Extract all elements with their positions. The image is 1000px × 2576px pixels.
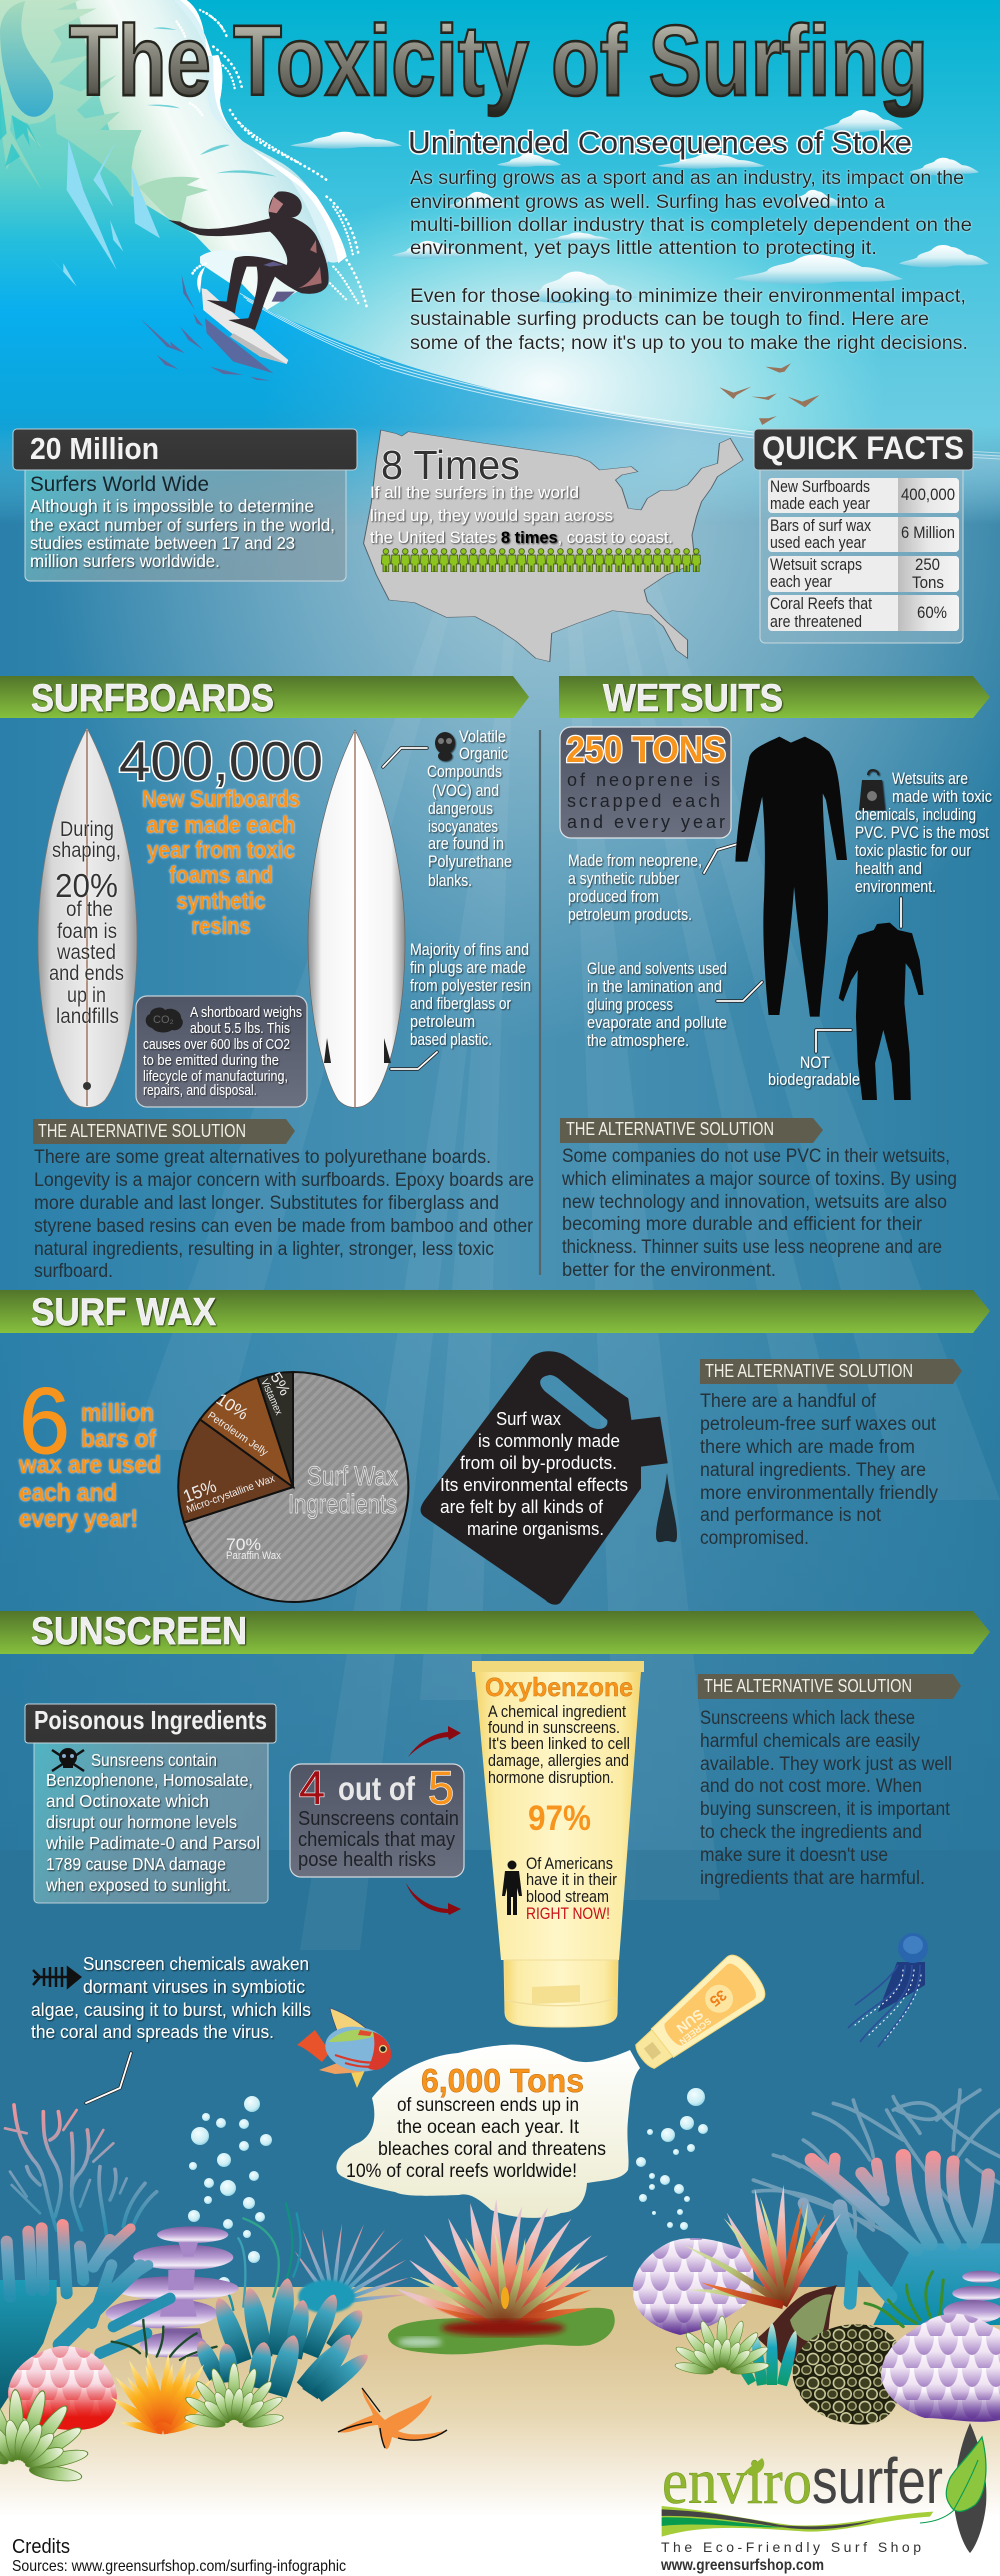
alternative solution: sunscreen: ingredients that are harmful.	[700, 1868, 925, 1889]
banner: surfboards: SURFBOARDS	[31, 677, 274, 720]
small tiered coral	[943, 2271, 1000, 2323]
panel: 20 million surfers: the exact number of surfers in the world,	[30, 515, 335, 535]
panel: 20 million surfers	[13, 429, 357, 581]
intro text: environment grows as well. Surfing has evolved into a	[410, 192, 885, 213]
fact row: new surfboards: 400,000	[901, 485, 955, 504]
text: coral virus note	[31, 1953, 311, 2042]
icon: sunscreen tube with oxybenzone facts: have it in their	[526, 1871, 617, 1889]
subtitle: Unintended Consequences of Stoke	[408, 125, 912, 160]
bubbles	[188, 2088, 708, 2289]
anemone: central coral	[388, 2199, 615, 2354]
fact row: coral reefs: are threatened	[770, 612, 862, 631]
fact row: surf wax: Bars of surf wax	[770, 516, 871, 535]
panel: poisonous ingredients	[25, 1704, 276, 1903]
logo: envirosurfer	[660, 2423, 986, 2574]
stat: 6 million bars of wax	[18, 1368, 161, 1533]
large pink-tipped coral	[873, 2243, 1000, 2325]
icon: sunscreen tube with oxybenzone facts: RIGHT NOW!	[526, 1905, 610, 1923]
stat: 400,000 new surfboards: 400,000	[119, 730, 323, 792]
icon: sunscreen tube with oxybenzone facts: blood stream	[526, 1888, 609, 1906]
text: neoprene note	[568, 852, 702, 924]
banner: sunscreen: SUNSCREEN	[31, 1610, 247, 1653]
map: United States with 8 times callout: the United States 8 times, coast to coast.	[370, 528, 673, 547]
text: VOC note: (VOC) and	[432, 782, 499, 800]
green leaf clusters	[183, 2363, 285, 2430]
panel: poisonous ingredients: while Padimate-0 and Parsol	[45, 1833, 260, 1853]
icon: sunscreen tube with oxybenzone facts	[472, 1661, 644, 2027]
surfboard with 20 percent foam waste: and ends	[49, 962, 124, 985]
alternative solution: surfboards: There are some great alternatives to polyurethane boards.	[34, 1147, 491, 1168]
panel: 20 million surfers: million surfers worldwide.	[30, 551, 220, 571]
icon: large wetsuit	[735, 737, 847, 1017]
icon: small wetsuit	[839, 923, 924, 1100]
text: fins note: and fiberglass or	[410, 995, 511, 1013]
chart: surf wax ingredients pie: Paraffin Wax	[226, 1550, 281, 1562]
stat: 6 million bars of wax: every year!	[19, 1505, 138, 1533]
surfboard with 20 percent foam waste: wasted	[56, 941, 116, 964]
panel: 250 tons of neoprene: and every year	[567, 812, 726, 832]
fact row: coral reefs	[768, 594, 959, 631]
coral reef: right group	[633, 2090, 1000, 2425]
text: VOC note: Polyurethane	[428, 853, 512, 871]
alternative solution: wetsuits: becoming more durable and efficient for their	[562, 1214, 923, 1235]
map: United States with 8 times callout	[364, 430, 743, 662]
fact row: new surfboards: New Surfboards	[770, 477, 870, 496]
alternative solution: sunscreen: make sure it doesn't use	[700, 1845, 888, 1866]
green leaf cluster	[674, 2316, 770, 2376]
panel: 4 out of 5 sunscreens: pose health risks	[298, 1849, 436, 1871]
panel: 4 out of 5 sunscreens: 5	[428, 1761, 454, 1814]
text: glue note: gluing process	[587, 996, 673, 1014]
panel: quick facts: QUICK FACTS	[762, 430, 964, 466]
purple petal coral	[633, 2238, 754, 2335]
banner: surfboards	[0, 676, 529, 720]
icon: sunscreen tube with oxybenzone facts: hormone disruption.	[488, 1769, 614, 1787]
panel: CO2 shortboard: causes over 600 lbs of CO2	[143, 1037, 290, 1053]
banner: wetsuits: WETSUITS	[603, 677, 783, 720]
icon: oil jug with text: is commonly made	[478, 1431, 620, 1451]
stat: 400,000 new surfboards: New Surfboards	[142, 786, 300, 813]
panel: poisonous ingredients: Sunsreens contain	[91, 1750, 217, 1770]
alternative solution: sunscreen: harmful chemicals are easily	[700, 1731, 920, 1752]
icon: oil jug with text: Its environmental effects	[440, 1475, 628, 1495]
fact row: surf wax: 6 Million	[901, 523, 955, 542]
icon: oil jug with text: marine organisms.	[467, 1519, 604, 1539]
surfboard with 20 percent foam waste: 20%	[55, 867, 118, 904]
chart: surf wax ingredients pie: 15%	[180, 1476, 219, 1507]
alternative solution: wetsuits: THE ALTERNATIVE SOLUTION	[566, 1119, 774, 1139]
callout: 6,000 tons blob with bottle	[336, 1950, 771, 2218]
icon: sunscreen bottle: SCREEN	[677, 2016, 713, 2047]
white crest and spray	[173, 0, 367, 307]
callout: 6,000 tons blob with bottle: bleaches coral and threatens	[378, 2139, 606, 2160]
intro text	[410, 168, 972, 354]
fact row: wetsuit scraps: 250	[915, 555, 940, 574]
chart: surf wax ingredients pie: Micro-crystalline Wax	[185, 1472, 277, 1516]
chart: surf wax ingredients pie	[178, 1370, 408, 1602]
fact row: wetsuit scraps: each year	[770, 572, 832, 591]
surfboard with 20 percent foam waste: landfills	[56, 1005, 119, 1028]
panel: CO2 shortboard: repairs, and disposal.	[143, 1083, 257, 1099]
text: neoprene note: petroleum products.	[568, 906, 692, 924]
panel: 4 out of 5 sunscreens: 4	[299, 1761, 325, 1814]
teal mass	[0, 2280, 57, 2410]
panel: 250 tons of neoprene	[560, 727, 731, 838]
text: neoprene note: produced from	[568, 888, 659, 906]
arrow: up to tube	[408, 1726, 461, 1757]
callout lines: surfboards and wetsuits	[383, 748, 901, 1069]
text: coral virus note: dormant viruses in symbiotic	[83, 1976, 305, 1997]
alternative solution: sunscreen: Sunscreens which lack these	[700, 1708, 915, 1729]
stat: 400,000 new surfboards	[119, 730, 323, 940]
pale branching coral	[753, 2090, 1000, 2247]
icon: sunscreen tube with oxybenzone facts: found in sunscreens.	[488, 1719, 620, 1737]
credits: Credits	[12, 2536, 70, 2558]
alternative solution: sunscreen: to check the ingredients and	[700, 1822, 922, 1843]
alternative solution: wetsuits: better for the environment.	[562, 1260, 776, 1281]
illustration: breaking wave with surfer	[0, 0, 1000, 560]
orange spiky coral	[108, 2352, 218, 2435]
callout line: coral virus	[86, 2053, 131, 2103]
intro text: environment, yet pays little attention to protecting it.	[410, 238, 877, 259]
fact row: wetsuit scraps: Tons	[912, 573, 944, 592]
text: coral virus note: Sunscreen chemicals awaken	[83, 1953, 309, 1974]
alternative solution: surf wax: THE ALTERNATIVE SOLUTION	[705, 1361, 913, 1381]
credits	[12, 2536, 346, 2575]
panel: 20 million surfers: 20 Million	[30, 431, 159, 466]
icon: oil drop	[656, 1473, 677, 1542]
text: VOC note: dangerous	[428, 800, 493, 818]
coral reef: left group	[0, 2105, 409, 2493]
text: glue note	[587, 960, 727, 1050]
chart: surf wax ingredients pie: 5%	[267, 1370, 293, 1399]
icon: sunscreen tube with oxybenzone facts: Oxybenzone	[485, 1672, 633, 1702]
purple tiered coral	[106, 2226, 239, 2358]
map: United States with 8 times callout: 8 Times	[381, 442, 520, 488]
panel: poisonous ingredients: and Octinoxate which	[46, 1791, 209, 1811]
text: glue note: in the lamination and	[587, 978, 722, 996]
alternative solution: surf wax: natural ingredients. They are	[700, 1460, 926, 1481]
alternative solution: surf wax: There are a handful of	[700, 1391, 877, 1412]
stat: 6 million bars of wax: million	[81, 1399, 154, 1427]
text: glue note: the atmosphere.	[587, 1032, 689, 1050]
panel: poisonous ingredients: 1789 cause DNA damage	[46, 1854, 226, 1874]
chart: surf wax ingredients pie: Vistamex	[258, 1377, 285, 1418]
green seagrass	[865, 2272, 943, 2327]
alternative solution: wetsuits: new technology and innovation, wetsuits are also	[562, 1192, 947, 1213]
panel: poisonous ingredients: disrupt our hormone levels	[46, 1812, 237, 1832]
text: VOC note: Compounds	[427, 763, 502, 781]
surfboard with 20 percent foam waste: During	[60, 818, 114, 841]
icon: sunscreen bottle: SUN	[674, 2006, 707, 2037]
text: glue note: Glue and solvents used	[587, 960, 727, 978]
text: neoprene note: a synthetic rubber	[568, 870, 679, 888]
stat: 400,000 new surfboards: synthetic	[176, 888, 266, 915]
text: fins note: petroleum	[410, 1013, 475, 1031]
panel: 20 million surfers: Although it is impossible to determine	[30, 496, 314, 516]
icon: CO2 cloud	[146, 1007, 183, 1032]
icon: sunscreen tube with oxybenzone facts: 97%	[528, 1799, 591, 1838]
alternative solution: sunscreen	[698, 1674, 961, 1889]
panel: 4 out of 5 sunscreens: chemicals that may	[298, 1829, 455, 1851]
text: fins note	[410, 941, 531, 1049]
text: fins note: Majority of fins and	[410, 941, 529, 959]
alternative solution: surfboards: THE ALTERNATIVE SOLUTION	[38, 1121, 246, 1141]
callout: 6,000 tons blob with bottle: 10% of coral reefs worldwide!	[346, 2161, 577, 2182]
alternative solution: surfboards: natural ingredients, resulting in a lighter, stronger, less toxic	[34, 1239, 494, 1260]
stat: 6 million bars of wax: each and	[19, 1479, 117, 1507]
panel: 250 tons of neoprene: scrapped each	[567, 791, 721, 811]
panel: poisonous ingredients: Benzophenone, Homosalate,	[46, 1770, 253, 1790]
banner: surf wax: SURF WAX	[31, 1291, 216, 1334]
panel: 4 out of 5 sunscreens: Sunscreens contain	[298, 1808, 459, 1830]
alternative solution: wetsuits: Some companies do not use PVC in their wetsuits,	[562, 1146, 950, 1167]
fact row: coral reefs: Coral Reefs that	[770, 594, 872, 613]
panel: CO2 shortboard: to be emitted during the	[143, 1053, 279, 1069]
swoosh	[662, 2506, 933, 2537]
text: not biodegradable: biodegradable	[768, 1071, 860, 1089]
chart: surf wax ingredients pie: Petroleum Jelly	[205, 1410, 271, 1459]
alternative solution: surf wax: petroleum-free surf waxes out	[700, 1414, 937, 1435]
text: wetsuit toxic chemicals note	[855, 770, 992, 896]
icon: board and leaf	[920, 2423, 986, 2553]
thin pink-tipped branching coral	[5, 2105, 157, 2237]
foreground blue coral	[60, 2265, 170, 2353]
fact row: new surfboards	[768, 477, 959, 513]
alternative solution: sunscreen: THE ALTERNATIVE SOLUTION	[704, 1676, 912, 1696]
alternative solution: sunscreen: and do not cost more. When	[700, 1776, 922, 1797]
logo: envirosurfer: The Eco-Friendly Surf Shop	[661, 2539, 921, 2555]
credits: Sources: www.greensurfshop.com/surfing-infographic	[12, 2558, 346, 2575]
text: fins note: fin plugs are made	[410, 959, 526, 977]
chart: surf wax ingredients pie: 70%	[226, 1535, 261, 1554]
alternative solution: surf wax: compromised.	[700, 1528, 809, 1549]
icon: tropical fish	[297, 2008, 394, 2088]
banner: sunscreen	[0, 1610, 990, 1654]
teal-green seagrass	[207, 2203, 301, 2310]
surfboard with 20 percent foam waste: foam is	[57, 920, 117, 943]
alternative solution: wetsuits	[560, 1118, 957, 1281]
map: United States with 8 times callout: lined up, they would span across	[370, 506, 613, 525]
text: not biodegradable: NOT	[800, 1054, 830, 1072]
alternative solution: surf wax: more environmentally friendly	[700, 1483, 938, 1504]
intro text: some of the facts; now it's up to you to make the right decisions.	[410, 333, 968, 354]
panel: 20 million surfers: Surfers World Wide	[30, 473, 209, 496]
icon: skull and crossbones	[52, 1748, 84, 1771]
red petal coral	[8, 2346, 117, 2430]
icon: oil jug with text: from oil by-products.	[460, 1453, 617, 1473]
surfboard underside with fins	[308, 730, 405, 1108]
intro text: sustainable surfing products can be tough to find. Here are	[410, 309, 929, 330]
icon: CO2 cloud: CO₂	[153, 1014, 174, 1026]
icon: oil jug with text: Surf wax	[496, 1409, 561, 1429]
text: VOC note: blanks.	[428, 872, 472, 890]
text: VOC note: Volatile	[459, 728, 506, 746]
callout: 6,000 tons blob with bottle: 6,000 Tons	[421, 2062, 584, 2099]
panel: CO2 shortboard: lifecycle of manufacturing,	[143, 1069, 288, 1085]
fact row: surf wax	[768, 516, 959, 552]
stat: 400,000 new surfboards: are made each	[146, 812, 296, 839]
panel: poisonous ingredients: Poisonous Ingredients	[34, 1705, 267, 1735]
divider	[539, 730, 541, 1275]
surfboard with 20 percent foam waste: up in	[67, 984, 106, 1007]
alternative solution: surfboards: surfboard.	[34, 1261, 113, 1282]
olive round coral	[793, 2324, 903, 2425]
panel: 20 million surfers: studies estimate between 17 and 23	[30, 533, 295, 553]
alternative solution: wetsuits: which eliminates a major source of toxins. By using	[561, 1169, 957, 1190]
small teal fingers	[723, 2323, 801, 2386]
panel: 4 out of 5 sunscreens: out of	[338, 1770, 416, 1807]
stat: 400,000 new surfboards: foams and	[169, 862, 273, 889]
alternative solution: surf wax: and performance is not	[700, 1505, 882, 1526]
birds	[719, 363, 820, 425]
text: not biodegradable	[768, 1054, 860, 1089]
alternative solution: sunscreen: buying sunscreen, it is important	[700, 1799, 951, 1820]
panel: CO2 shortboard	[136, 996, 307, 1107]
icon: sunscreen tube with oxybenzone facts: It's been linked to cell	[488, 1735, 630, 1753]
intro text: Even for those looking to minimize their environmental impact,	[410, 286, 966, 307]
anemone mantle	[757, 2285, 837, 2368]
icon: person	[502, 1860, 522, 1915]
white lines of the wave lip continuing right	[380, 360, 1000, 459]
icon: sunscreen bottle	[625, 1950, 771, 2081]
icon: oil jug with text: are felt by all kinds of	[440, 1497, 604, 1517]
alternative solution: surf wax	[700, 1359, 962, 1549]
text: glue note: evaporate and pollute	[587, 1014, 727, 1032]
icon: starfish	[338, 2388, 447, 2449]
panel: CO2 shortboard: about 5.5 lbs. This	[190, 1021, 290, 1037]
text: VOC note: are found in	[428, 835, 504, 853]
text: VOC note: isocyanates	[428, 818, 498, 836]
fact row: coral reefs: 60%	[917, 603, 947, 622]
fact row: new surfboards: made each year	[770, 494, 870, 513]
arrow: down to tube	[406, 1883, 461, 1915]
text: coral virus note: algae, causing it to burst, which kills	[31, 1999, 311, 2020]
text: VOC note	[427, 728, 512, 890]
alternative solution: surf wax: there which are made from	[700, 1437, 915, 1458]
alternative solution: sunscreen: available. They work just as well	[700, 1754, 952, 1775]
banner: wetsuits	[559, 676, 990, 720]
alternative solution: surfboards: styrene based resins can even be made from bamboo and other	[34, 1216, 534, 1237]
grass anemone	[684, 2185, 841, 2313]
banner: surf wax	[0, 1290, 990, 1334]
icon: nuclear plant	[859, 770, 885, 810]
logo: envirosurfer: enviro	[662, 2446, 812, 2518]
chart: surf wax ingredients pie: Ingredients	[288, 1489, 397, 1519]
stat: 400,000 new surfboards: resins	[192, 913, 250, 940]
stat: 6 million bars of wax: wax are used	[18, 1451, 161, 1479]
icon: sunscreen tube with oxybenzone facts: Of Americans	[526, 1855, 613, 1873]
icon: oil jug with text	[421, 1351, 668, 1605]
alternative solution: surfboards: more durable and last longer. Substitutes for fiberglass and	[34, 1193, 499, 1214]
alternative solution: surfboards	[33, 1119, 534, 1282]
icon: sunscreen bottle: 35	[706, 1986, 730, 2010]
icon: jellyfish	[848, 1933, 928, 2047]
text: wetsuit toxic chemicals note: health and	[855, 860, 922, 878]
fact row: wetsuit scraps	[768, 555, 959, 592]
callout: 6,000 tons blob with bottle: of sunscreen ends up in	[397, 2095, 579, 2116]
stat: 400,000 new surfboards: year from toxic	[147, 837, 295, 864]
callout: 6,000 tons blob with bottle: the ocean each year. It	[397, 2117, 580, 2138]
fact row: wetsuit scraps: Wetsuit scraps	[770, 555, 862, 574]
panel: 4 out of 5 sunscreens	[290, 1761, 464, 1877]
intro text: multi-billion dollar industry that is completely dependent on the	[410, 215, 972, 236]
text: fins note: based plastic.	[410, 1031, 492, 1049]
panel: poisonous ingredients: when exposed to sunlight.	[45, 1875, 231, 1895]
stat: 6 million bars of wax: bars of	[81, 1425, 157, 1453]
stat: 6 million bars of wax: 6	[19, 1368, 70, 1473]
icon: gas mask	[435, 732, 455, 761]
text: neoprene note: Made from neoprene,	[568, 852, 702, 870]
icon: sunscreen tube with oxybenzone facts: A chemical ingredient	[488, 1703, 626, 1721]
text: fins note: from polyester resin	[410, 977, 531, 995]
panel: 250 tons of neoprene: of neoprene is	[567, 770, 721, 790]
icon: sunscreen tube with oxybenzone facts: damage, allergies and	[488, 1752, 629, 1770]
alternative solution: wetsuits: thickness. Thinner suits use less neoprene and are	[562, 1237, 942, 1258]
alternative solution: surfboards: Longevity is a major concern with surfboards. Epoxy boards are	[34, 1170, 534, 1191]
logo: envirosurfer: surfer	[812, 2445, 943, 2517]
chart: surf wax ingredients pie: Surf Wax	[307, 1461, 398, 1491]
thick branch coral	[7, 2225, 131, 2297]
surfboard with 20 percent foam waste	[38, 728, 137, 1108]
text: VOC note: Organic	[459, 745, 508, 763]
text: coral virus note: the coral and spreads the virus.	[31, 2021, 274, 2042]
icon: fish skeleton	[33, 1967, 80, 1987]
text: wetsuit toxic chemicals note: chemicals, including	[855, 806, 976, 824]
clouds	[290, 110, 989, 303]
panel: quick facts	[754, 429, 973, 643]
surfboard with 20 percent foam waste: of the	[66, 898, 113, 921]
text: wetsuit toxic chemicals note: toxic plastic for our	[855, 842, 971, 860]
teal finger coral	[192, 2277, 373, 2403]
purple petal coral large	[881, 2314, 1000, 2422]
light blue and pink fan	[292, 2223, 409, 2305]
surfer	[140, 191, 329, 381]
map: United States with 8 times callout: If all the surfers in the world	[370, 483, 579, 502]
chart: surf wax ingredients pie: 10%	[213, 1389, 252, 1424]
fact row: surf wax: used each year	[770, 533, 866, 552]
panel: 250 tons of neoprene: 250 TONS	[566, 729, 726, 770]
panel: CO2 shortboard: A shortboard weighs	[190, 1005, 302, 1021]
intro text: As surfing grows as a sport and as an industry, its impact on the	[410, 168, 964, 189]
dark seaweed	[112, 2320, 217, 2360]
logo: envirosurfer: www.greensurfshop.com	[660, 2557, 824, 2574]
text: wetsuit toxic chemicals note: Wetsuits are	[892, 770, 968, 788]
surfboard with 20 percent foam waste: shaping,	[52, 839, 121, 862]
text: wetsuit toxic chemicals note: environment.	[855, 878, 936, 896]
